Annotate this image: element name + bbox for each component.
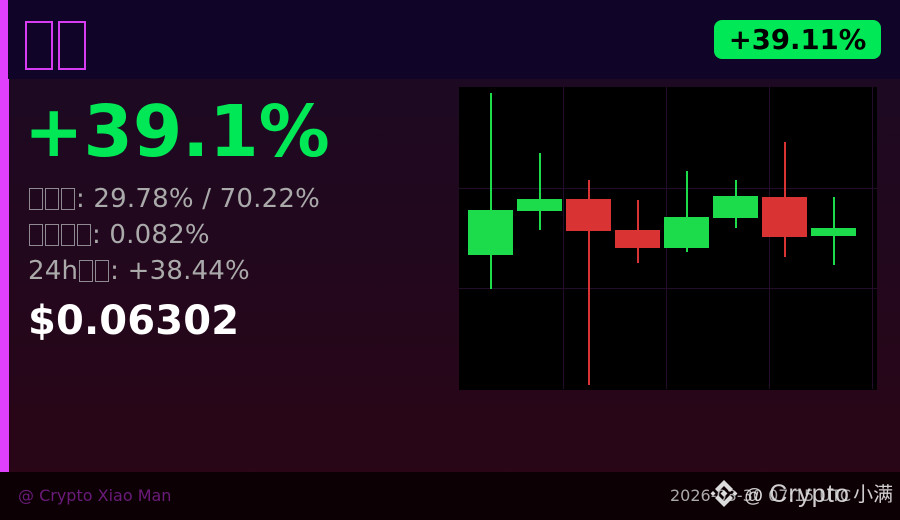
candle 5 — [664, 171, 709, 252]
handle: @ Crypto Xiao Man — [18, 486, 171, 505]
candle 7 — [762, 142, 807, 257]
stat: long short ratio: : 29.78% / 70.22% — [76, 184, 320, 214]
timestamp: 2026-03-30 07:15 UTC — [670, 486, 851, 505]
price: $0.06302 — [28, 298, 239, 344]
footer band — [0, 472, 900, 520]
candle 3 — [566, 180, 611, 385]
watermark icon — [710, 480, 738, 507]
header band — [8, 0, 900, 79]
title — [25, 21, 86, 70]
accent bar — [0, 0, 9, 472]
candle 2 — [517, 153, 562, 230]
stat: funding rate: : 0.082% — [92, 220, 210, 250]
candle 4 — [615, 200, 660, 263]
change badge — [714, 20, 881, 59]
watermark text: @Crypto小满 — [744, 478, 893, 508]
change badge: +39.11% — [729, 24, 866, 56]
candlestick chart — [459, 87, 877, 390]
candle 8 — [811, 197, 856, 265]
candle 6 — [713, 180, 758, 228]
headline change: +39.1% — [24, 90, 330, 173]
stat: 24h change: 24h : +38.44% — [28, 256, 250, 286]
candle 1 — [468, 93, 513, 289]
